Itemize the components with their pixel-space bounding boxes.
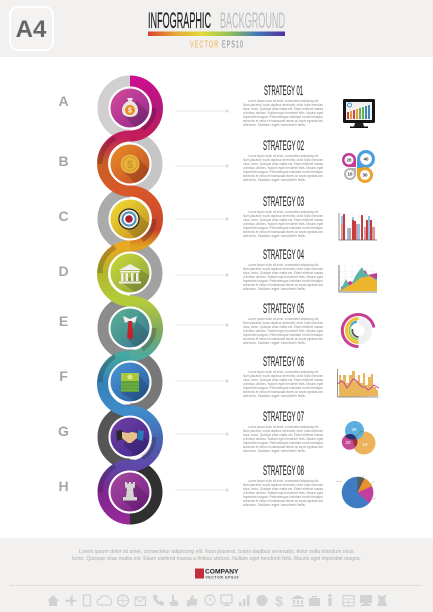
strategy 01: risus, tortor. Quisque vitae mattis est. Etiam eleifend massa: [243, 107, 323, 111]
subtitle: [190, 39, 243, 50]
icon: four number petals: [342, 150, 375, 183]
strategy 02: senectus et netus et malesuada fames ac turpis egestas sed: [243, 174, 323, 178]
strategy 01: [243, 82, 323, 127]
strategy 06: [243, 353, 323, 398]
strategy 07: ultrices. Nullam eget hendrerit felis.: [243, 449, 306, 453]
strategy 06: risus, tortor. Quisque vitae mattis est. Etiam eleifend massa: [243, 378, 323, 382]
circle B: coin: $: [127, 159, 133, 171]
footer text: Lorem ipsum dolor sit amet, consectetur adipiscing elit. Nam placerat, turpis dapibus venenatis, dolor nulla interdum risus.: [79, 549, 355, 555]
strategy 07: Nam placerat, turpis dapibus venenatis, dolor nulla interdum: [243, 429, 323, 433]
strategy 02: risus, tortor. Quisque vitae mattis est. Etiam eleifend massa: [243, 162, 323, 166]
chart: line and bars: [337, 369, 379, 397]
strategy 07: [243, 408, 323, 453]
circle H: chess rook: [110, 472, 150, 512]
strategy 07: a finibus ultrices. Nullam eget hendrerit felis. Mauris eget: [243, 437, 323, 441]
footer icon row: [47, 593, 387, 609]
chart: venn: 19: [362, 442, 368, 447]
strategy 01: Lorem ipsum dolor sit amet, consectetur adipiscing elit.: [248, 99, 319, 103]
strategy 03: STRATEGY 03: [263, 193, 304, 209]
dotted divider: [10, 584, 421, 586]
circle D: bank: [110, 252, 150, 294]
strategy 04: [243, 246, 323, 291]
strategy 05: imperdiet magna. Pellentesque habitant morbi tristique: [243, 333, 323, 337]
strategy 06: Lorem ipsum dolor sit amet, consectetur adipiscing elit.: [248, 370, 319, 374]
subtitle: EPS10: [222, 39, 243, 50]
chart: radial rings: [342, 315, 374, 347]
strategy 01: imperdiet magna. Pellentesque habitant morbi tristique: [243, 115, 323, 119]
strategy 08: risus, tortor. Quisque vitae mattis est. Etiam eleifend massa: [243, 487, 323, 491]
strategy 08: STRATEGY 08: [263, 462, 304, 478]
section letters: H: [58, 478, 69, 494]
strategy 04: risus, tortor. Quisque vitae mattis est. Etiam eleifend massa: [243, 271, 323, 275]
strategy 03: Nam placerat, turpis dapibus venenatis, dolor nulla interdum: [243, 214, 323, 218]
chart: venn: 20: [345, 440, 351, 445]
section letters: F: [59, 368, 68, 384]
strategy 04: STRATEGY 04: [263, 246, 304, 262]
company logo: VECTOR EPS10: [206, 576, 239, 580]
strategy 03: [243, 193, 323, 238]
strategy 05: ultrices. Nullam eget hendrerit felis.: [243, 341, 306, 345]
strategy 02: imperdiet magna. Pellentesque habitant morbi tristique: [243, 170, 323, 174]
strategy 07: imperdiet magna. Pellentesque habitant morbi tristique: [243, 441, 323, 445]
strategy 03: Lorem ipsum dolor sit amet, consectetur adipiscing elit.: [248, 210, 319, 214]
icon: four number petals: 20: [346, 158, 352, 162]
section letters: A: [58, 93, 69, 109]
strategy 03: a finibus ultrices. Nullam eget hendrerit felis. Mauris eget: [243, 222, 323, 226]
grey rings: [103, 81, 157, 519]
strategy 03: ultrices. Nullam eget hendrerit felis.: [243, 234, 306, 238]
strategy 08: a finibus ultrices. Nullam eget hendrerit felis. Mauris eget: [243, 491, 323, 495]
strategy 05: a finibus ultrices. Nullam eget hendrerit felis. Mauris eget: [243, 329, 323, 333]
section letters: D: [58, 263, 69, 279]
strategy 06: senectus et netus et malesuada fames ac turpis egestas sed: [243, 390, 323, 394]
section letters: B: [58, 153, 69, 169]
circle B: coin: [110, 144, 150, 184]
section letters: C: [58, 208, 69, 224]
strategy 07: STRATEGY 07: [263, 408, 304, 424]
footer band: [0, 538, 433, 612]
strategy 05: Lorem ipsum dolor sit amet, consectetur adipiscing elit.: [248, 317, 319, 321]
strategy 02: STRATEGY 02: [263, 137, 304, 153]
A4 badge: A4: [16, 16, 47, 43]
strategy 03: risus, tortor. Quisque vitae mattis est. Etiam eleifend massa: [243, 218, 323, 222]
footer text: tortor. Quisque vitae mattis est. Etiam eleifend massa a finibus ultrices. Nullam eget hendrerit felis. Mauris eget imperdiet magna.: [72, 556, 361, 562]
icon: four number petals: 30: [362, 172, 368, 178]
strategy 03: imperdiet magna. Pellentesque habitant morbi tristique: [243, 226, 323, 230]
connector lines: [175, 110, 228, 491]
circle E: shirt and tie: [110, 308, 150, 348]
icon: monitor with bar chart: [343, 99, 375, 128]
strategy 05: STRATEGY 05: [263, 300, 304, 316]
strategy 04: imperdiet magna. Pellentesque habitant morbi tristique: [243, 279, 323, 283]
chart: layered area: [339, 265, 377, 292]
strategy 04: senectus et netus et malesuada fames ac turpis egestas sed: [243, 283, 323, 287]
chart: pie: [336, 475, 376, 508]
strategy 05: risus, tortor. Quisque vitae mattis est. Etiam eleifend massa: [243, 325, 323, 329]
strategy 01: a finibus ultrices. Nullam eget hendrerit felis. Mauris eget: [243, 111, 323, 115]
rainbow bar: [148, 32, 285, 36]
strategy 04: Lorem ipsum dolor sit amet, consectetur adipiscing elit.: [248, 263, 319, 267]
circle F: banknotes: [110, 362, 150, 402]
circle G: handshake: [110, 416, 150, 458]
strategy 08: ultrices. Nullam eget hendrerit felis.: [243, 503, 306, 507]
strategy 06: ultrices. Nullam eget hendrerit felis.: [243, 394, 306, 398]
strategy 01: STRATEGY 01: [264, 82, 303, 98]
spiral timeline: [100, 81, 158, 519]
company logo: COMPANY: [205, 568, 239, 576]
company logo: [195, 568, 239, 580]
section letters: [58, 93, 69, 494]
strategy 03: senectus et netus et malesuada fames ac turpis egestas sed: [243, 230, 323, 234]
strategy 08: imperdiet magna. Pellentesque habitant morbi tristique: [243, 495, 323, 499]
strategy 08: Nam placerat, turpis dapibus venenatis, dolor nulla interdum: [243, 483, 323, 487]
strategy 04: Nam placerat, turpis dapibus venenatis, dolor nulla interdum: [243, 267, 323, 271]
text: BACKGROUND: [220, 8, 285, 33]
strategy 02: Lorem ipsum dolor sit amet, consectetur adipiscing elit.: [248, 154, 319, 158]
strategy 05: [243, 300, 323, 345]
strategy 06: a finibus ultrices. Nullam eget hendrerit felis. Mauris eget: [243, 382, 323, 386]
strategy 06: imperdiet magna. Pellentesque habitant morbi tristique: [243, 386, 323, 390]
strategy 01: Nam placerat, turpis dapibus venenatis, dolor nulla interdum: [243, 103, 323, 107]
strategy 07: senectus et netus et malesuada fames ac turpis egestas sed: [243, 445, 323, 449]
colored ribbon: [102, 81, 158, 519]
circle C: target: [110, 198, 150, 240]
strategy 07: Lorem ipsum dolor sit amet, consectetur adipiscing elit.: [248, 425, 319, 429]
strategy 04: ultrices. Nullam eget hendrerit felis.: [243, 287, 306, 291]
strategy 05: Nam placerat, turpis dapibus venenatis, dolor nulla interdum: [243, 321, 323, 325]
strategy 02: [243, 137, 323, 182]
section letters: E: [59, 313, 68, 329]
circle A: money bag: [110, 88, 150, 128]
strategy 08: Lorem ipsum dolor sit amet, consectetur adipiscing elit.: [248, 479, 319, 483]
circle A: money bag: $: [128, 108, 132, 114]
strategy 06: Nam placerat, turpis dapibus venenatis, dolor nulla interdum: [243, 374, 323, 378]
strategy 01: ultrices. Nullam eget hendrerit felis.: [243, 123, 306, 127]
strategy 08: [243, 462, 323, 507]
section letters: G: [58, 423, 69, 439]
icon: four number petals: 10: [347, 172, 353, 176]
A4 badge: [10, 7, 53, 50]
icon: four number petals: 40: [363, 156, 369, 162]
subtitle: VECTOR: [190, 39, 218, 50]
ribbon fold shading: [100, 108, 154, 492]
strategy 01: senectus et netus et malesuada fames ac turpis egestas sed: [243, 119, 323, 123]
footer text: [72, 549, 361, 562]
header band: [0, 0, 433, 57]
footer icon row: $: [275, 593, 283, 609]
strategy 04: a finibus ultrices. Nullam eget hendrerit felis. Mauris eget: [243, 275, 323, 279]
chart: grouped bars: [339, 213, 377, 240]
strategy 07: risus, tortor. Quisque vitae mattis est. Etiam eleifend massa: [243, 433, 323, 437]
strategy 08: senectus et netus et malesuada fames ac turpis egestas sed: [243, 499, 323, 503]
chart: venn: 28: [351, 427, 357, 432]
strategy 06: STRATEGY 06: [263, 353, 304, 369]
strategy 02: a finibus ultrices. Nullam eget hendrerit felis. Mauris eget: [243, 166, 323, 170]
strategy 05: senectus et netus et malesuada fames ac turpis egestas sed: [243, 337, 323, 341]
strategy 02: Nam placerat, turpis dapibus venenatis, dolor nulla interdum: [243, 158, 323, 162]
title: INFOGRAPHIC: [148, 8, 211, 33]
chart: venn: [342, 421, 376, 454]
strategy 02: ultrices. Nullam eget hendrerit felis.: [243, 178, 306, 182]
